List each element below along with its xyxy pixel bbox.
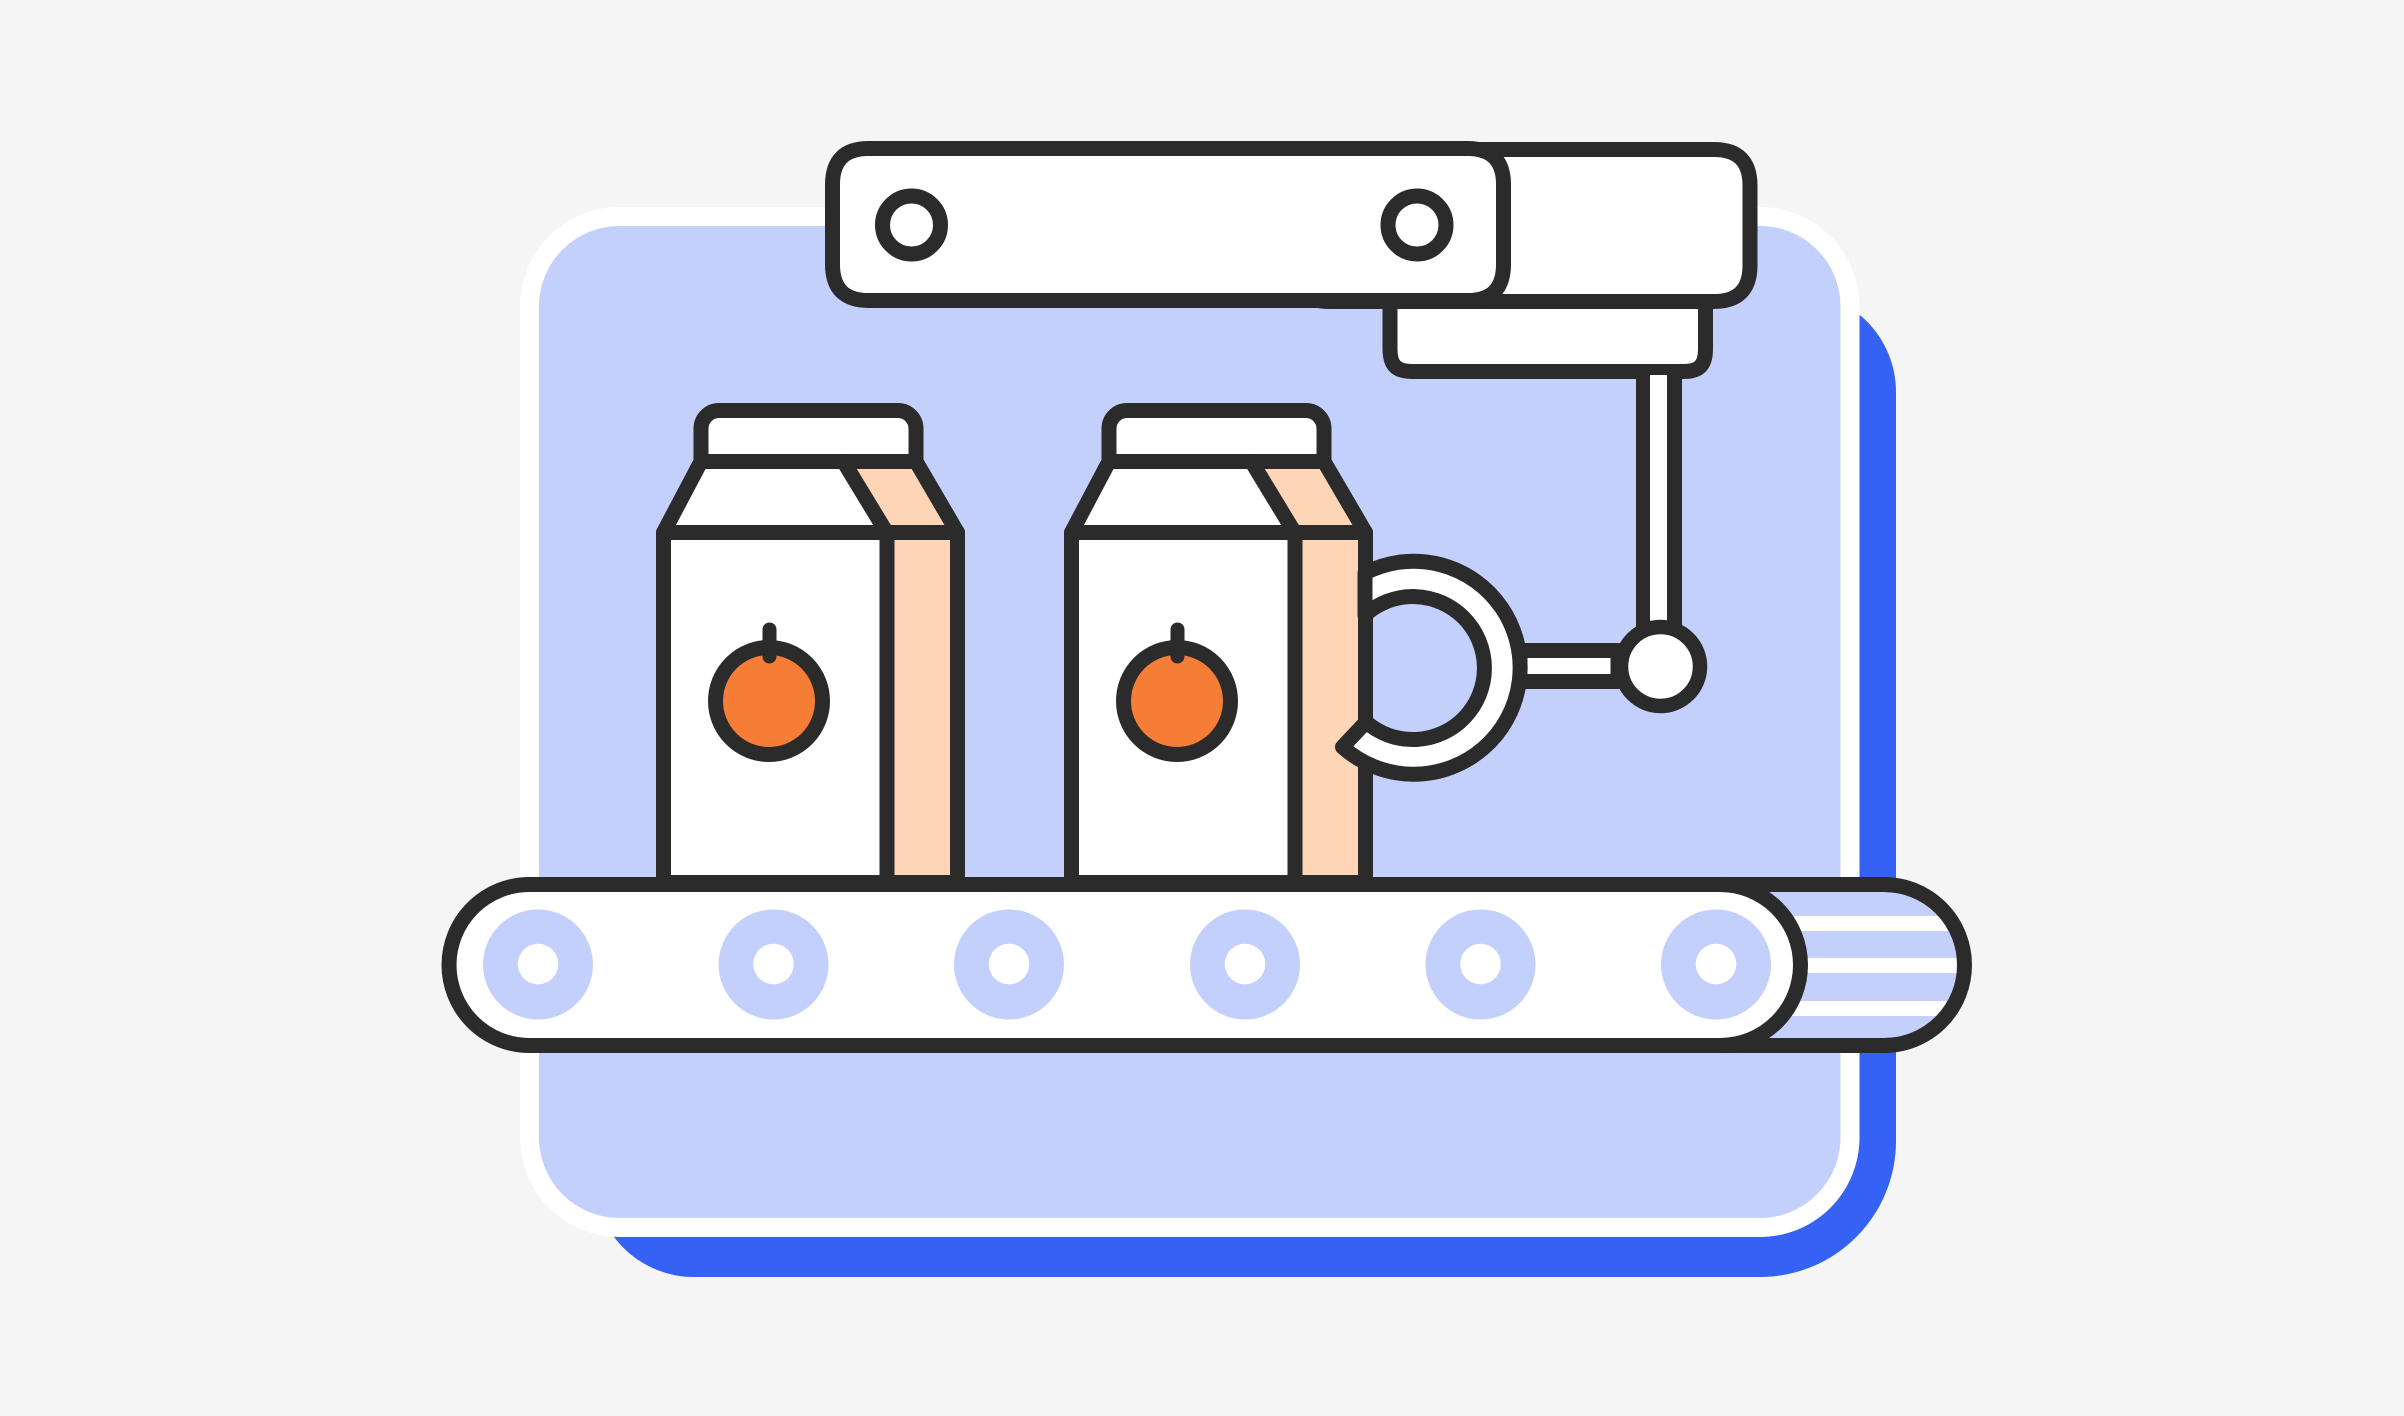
- roller 5: [1426, 910, 1536, 1020]
- carton sloped top: [1072, 462, 1295, 532]
- front housing: [832, 148, 1504, 300]
- roller 4: [1190, 910, 1300, 1020]
- left bolt: [882, 196, 940, 254]
- gripper ring: [1342, 561, 1520, 774]
- icon: orange: [716, 630, 822, 754]
- icon: orange: [1124, 630, 1230, 754]
- horizontal connector: [1520, 650, 1618, 682]
- roller 2: [718, 910, 828, 1020]
- overhead machine: [832, 148, 1750, 372]
- machine neck: [1390, 301, 1706, 372]
- right bolt: [1388, 196, 1446, 254]
- carton cap: [1109, 410, 1324, 462]
- carton front face: [664, 532, 887, 882]
- robot arm: [1342, 375, 1700, 774]
- juice carton 1: [664, 410, 958, 882]
- carton cap: [701, 410, 916, 462]
- roller 6: [1661, 910, 1771, 1020]
- carton sloped top: [664, 462, 887, 532]
- roller 1: [483, 910, 593, 1020]
- illustration: juice cartons on a conveyor with robot arm: [442, 141, 1972, 1277]
- carton side face: [887, 532, 958, 882]
- belt front section: [449, 884, 1800, 1046]
- carton side face: [1295, 532, 1366, 882]
- back housing: [1290, 150, 1750, 302]
- panel: white border with light blue fill: [530, 216, 1850, 1228]
- conveyor belt: [449, 884, 1964, 1046]
- carton front face: [1072, 532, 1295, 882]
- belt back section with stripes: [1720, 877, 1972, 1053]
- panel: blue shadow: [594, 292, 1896, 1277]
- juice carton 2: [1072, 410, 1366, 882]
- vertical arm: [1643, 375, 1674, 645]
- roller 3: [954, 910, 1064, 1020]
- joint circle: [1621, 627, 1700, 706]
- carton sloped side: [1252, 462, 1366, 532]
- carton sloped side: [844, 462, 958, 532]
